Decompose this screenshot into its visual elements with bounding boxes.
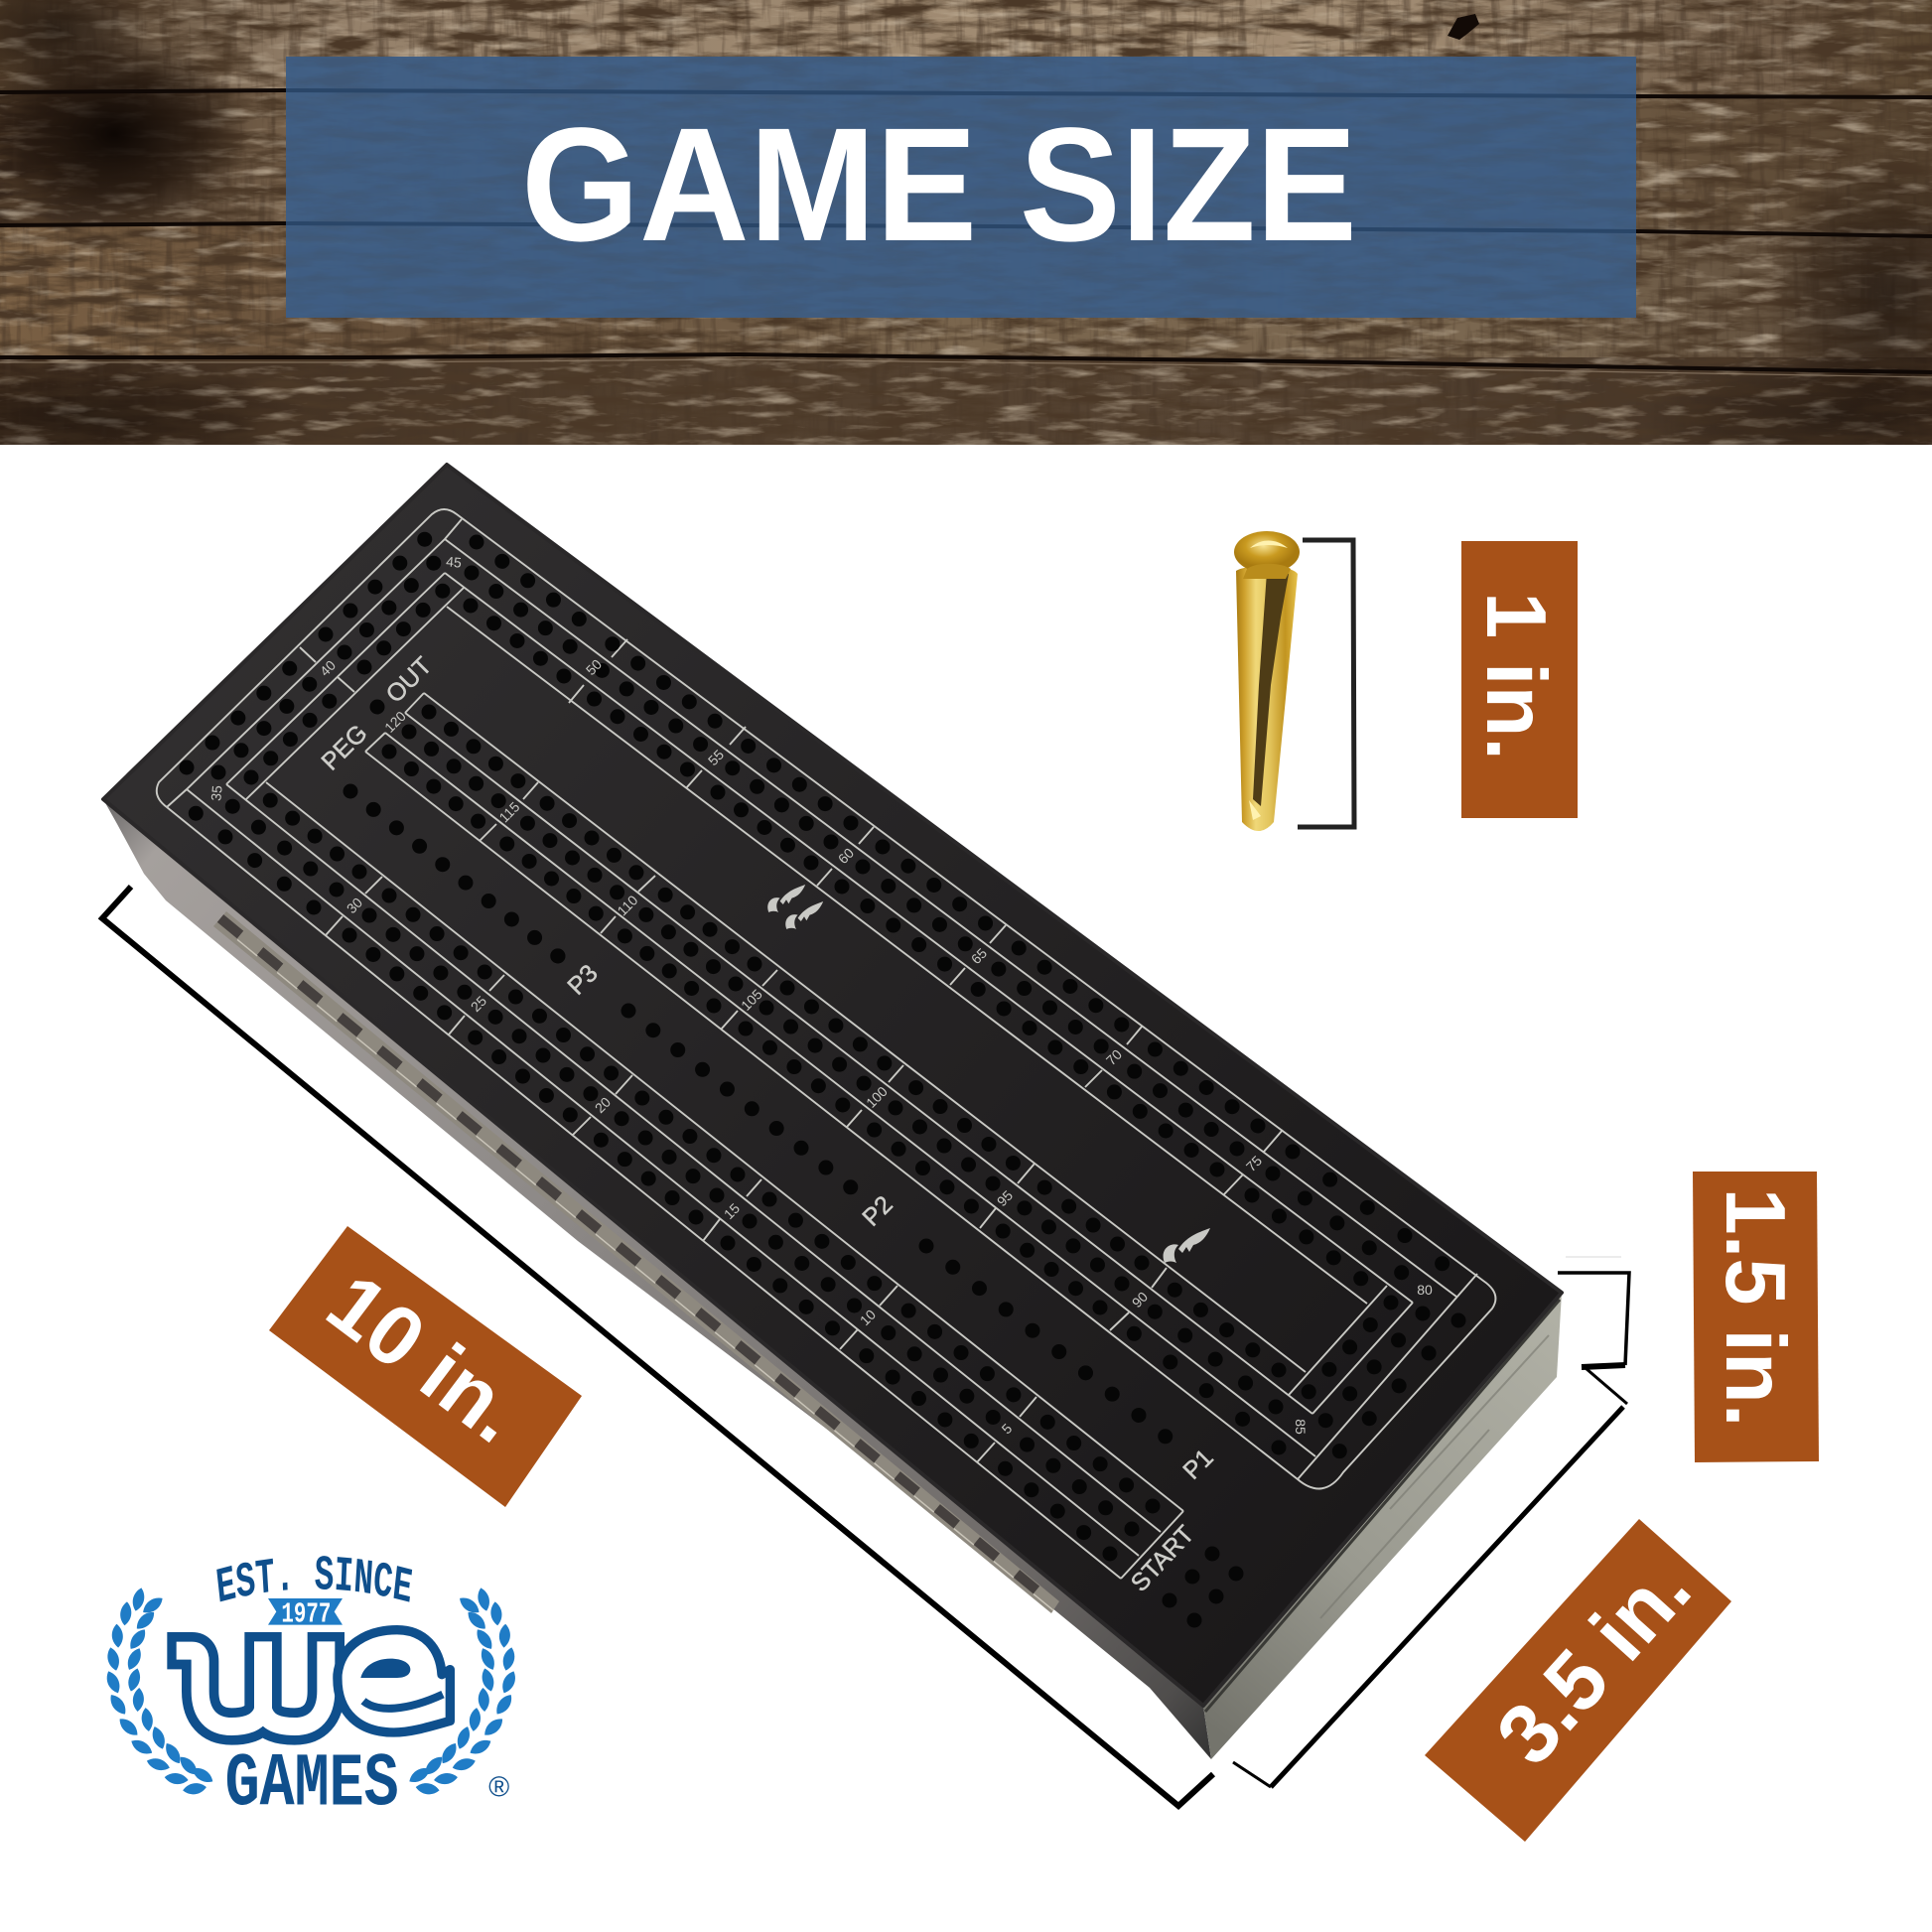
printed track lines (157, 509, 1495, 1579)
label: 10 in (269, 1226, 582, 1507)
board words: OUT (380, 651, 438, 709)
score numbers: 110 (614, 892, 641, 919)
label: 3.5 in: 3.5 in. (1478, 1542, 1709, 1783)
score numbers: 85 (1293, 1419, 1309, 1435)
est. since arc text: EST. SINCE (216, 1556, 413, 1602)
score numbers: 100 (863, 1083, 891, 1111)
score numbers: 25 (468, 993, 489, 1015)
est. since arc text (216, 1556, 413, 1602)
laurel wreath right (406, 1587, 519, 1796)
score numbers: 50 (583, 656, 605, 678)
we lettering (167, 1630, 450, 1732)
board top face (103, 465, 1562, 1706)
score numbers: 55 (705, 747, 727, 768)
hinge (213, 911, 1059, 1613)
label: 10 in: 10 in. (310, 1256, 539, 1461)
board left side face (103, 799, 1211, 1759)
score numbers: 10 (857, 1307, 879, 1328)
board words: P2 (857, 1190, 898, 1232)
laurel wreath left (103, 1587, 215, 1796)
registered mark: ® (488, 1771, 509, 1803)
score numbers: 20 (592, 1094, 614, 1116)
score numbers: 15 (721, 1200, 743, 1222)
label: 1 in (1461, 541, 1578, 818)
score numbers: 65 (968, 945, 990, 967)
score numbers: 105 (738, 986, 765, 1014)
icon: skunks (767, 885, 1210, 1263)
peg bracket (1298, 540, 1354, 827)
10 inch bracket (102, 887, 1213, 1806)
title banner (286, 57, 1636, 318)
score numbers: 115 (495, 798, 523, 826)
label: 1.5 in (1693, 1172, 1819, 1462)
score numbers: 40 (317, 657, 339, 679)
1977 ribbon: 1977 (281, 1597, 331, 1630)
1.5 inch bracket (1558, 1257, 1629, 1367)
logo: WE Games (107, 1556, 515, 1827)
score numbers: 45 (446, 553, 463, 571)
score numbers: 120 (381, 708, 409, 736)
label: 1.5 in: 1.5 in. (1708, 1188, 1802, 1427)
board words: P3 (562, 959, 604, 1001)
3.5 inch bracket (1233, 1368, 1627, 1787)
label: 1 in: 1 in. (1468, 592, 1563, 760)
board words: START (1126, 1520, 1199, 1597)
board right side face (1203, 1293, 1562, 1759)
wood background header (0, 0, 1932, 477)
score numbers: 60 (835, 845, 857, 867)
board words (316, 651, 1219, 1597)
score numbers: 90 (1129, 1289, 1151, 1311)
score numbers (207, 553, 1433, 1437)
peg holes (187, 539, 1458, 1628)
label: 3.5 in (1425, 1519, 1731, 1842)
score numbers: 30 (344, 895, 365, 916)
score numbers: 95 (994, 1187, 1016, 1209)
score numbers: 35 (207, 784, 225, 801)
cribbage board (103, 465, 1562, 1759)
title: GAME SIZE (521, 93, 1357, 275)
board words: P1 (1177, 1444, 1219, 1485)
score numbers: 80 (1417, 1282, 1433, 1298)
icon: gold peg (1234, 531, 1300, 831)
games text: GAMES (225, 1741, 399, 1827)
score numbers: 75 (1243, 1153, 1265, 1174)
board words: PEG (316, 719, 373, 776)
score numbers: 5 (999, 1420, 1016, 1437)
score numbers: 70 (1103, 1046, 1125, 1068)
